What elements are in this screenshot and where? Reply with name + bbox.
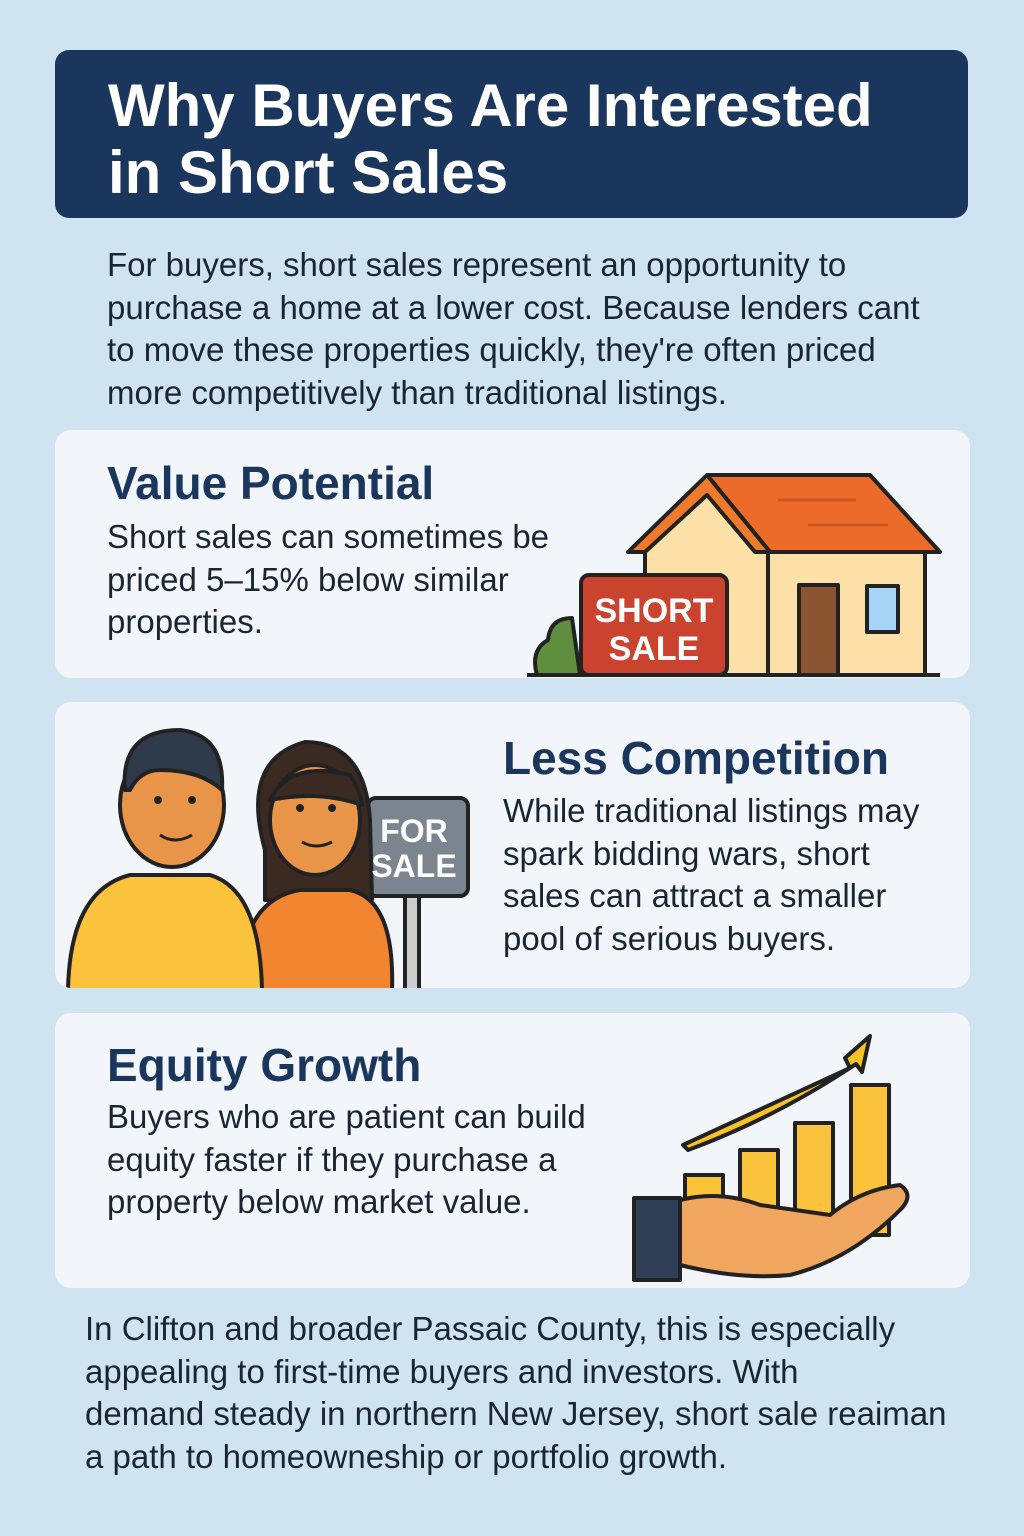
panel: equity growth (55, 1013, 970, 1288)
intro text: purchase a home at a lower cost. Because lenders cant (107, 289, 920, 326)
text: value potential: properties. (107, 603, 263, 640)
text: value potential: Short sales can sometimes be (107, 518, 549, 555)
icon: hand with rising bar chart (632, 1034, 910, 1282)
illustration: couple with for sale sign: SALE (371, 848, 457, 884)
title (55, 50, 968, 218)
heading: equity growth: Equity Growth (107, 1039, 421, 1091)
text: value potential (107, 518, 549, 640)
text: equity growth: Buyers who are patient can build (107, 1098, 586, 1135)
heading: less competition: Less Competition (503, 732, 889, 784)
illustration: couple with for sale sign (66, 728, 470, 988)
icon: house with short sale sign: SHORT (594, 592, 714, 630)
text: equity growth (107, 1098, 586, 1220)
illustration: couple with for sale sign: FOR (380, 813, 448, 849)
icon: house with short sale sign (527, 472, 942, 677)
footer text: In Clifton and broader Passaic County, this is especially (85, 1310, 895, 1347)
footer text (85, 1310, 946, 1475)
text: less competition (503, 792, 920, 957)
text: less competition: pool of serious buyers. (503, 920, 835, 957)
intro text: more competitively than traditional listings. (107, 374, 727, 411)
panel: less competition (55, 702, 970, 988)
panel: value potential (55, 430, 970, 678)
footer text: a path to homeowneship or portfolio growth. (85, 1438, 727, 1475)
footer text: demand steady in northern New Jersey, short sale reaiman (85, 1395, 946, 1432)
text: less competition: spark bidding wars, short (503, 835, 870, 872)
intro text: For buyers, short sales represent an opportunity to (107, 246, 846, 283)
intro text: to move these properties quickly, they're often priced (107, 331, 876, 368)
text: less competition: While traditional listings may (503, 792, 919, 829)
text: value potential: priced 5–15% below similar (107, 561, 509, 598)
icon: house with short sale sign: SALE (609, 630, 699, 668)
title: in Short Sales (108, 139, 508, 206)
heading: value potential: Value Potential (107, 457, 434, 509)
text: less competition: sales can attract a smaller (503, 877, 886, 914)
text: equity growth: equity faster if they purchase a (107, 1141, 556, 1178)
intro text (107, 246, 920, 411)
footer text: appealing to first-time buyers and investors. With (85, 1353, 798, 1390)
text: equity growth: property below market value. (107, 1183, 531, 1220)
title: Why Buyers Are Interested (108, 72, 873, 139)
